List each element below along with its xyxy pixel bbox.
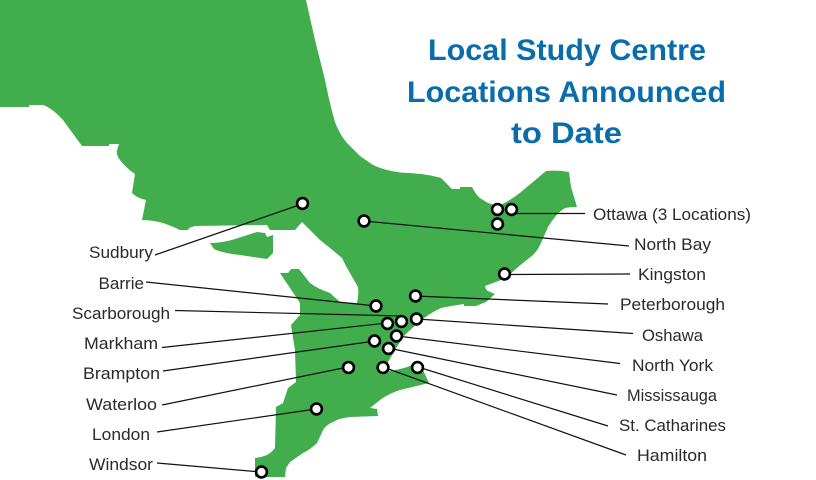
city labels: right: Kingston: [638, 265, 706, 284]
location markers: [256, 198, 517, 477]
map: Manitoulin Island: [210, 232, 273, 259]
city labels: right: St. Catharines: [619, 416, 726, 435]
city labels: right: [593, 205, 751, 465]
city labels: left: Waterloo: [86, 395, 157, 414]
city labels: right: Mississauga: [627, 386, 718, 405]
city labels: left: Scarborough: [72, 304, 170, 323]
city labels: right: Peterborough: [620, 295, 725, 314]
city labels: right: Ottawa (3 Locations): [593, 205, 751, 224]
title: Local Study Centre: [428, 34, 706, 67]
city labels: left: Windsor: [89, 455, 153, 474]
city labels: right: Oshawa: [642, 326, 704, 345]
city labels: left: London: [92, 425, 150, 444]
city labels: left: [72, 243, 170, 474]
leader lines: [146, 204, 633, 472]
title: to Date: [511, 117, 622, 150]
city labels: left: Markham: [84, 334, 158, 353]
city labels: right: Hamilton: [637, 446, 707, 465]
city labels: left: Sudbury: [89, 243, 153, 262]
title: [407, 34, 726, 150]
city labels: right: North Bay: [634, 235, 712, 254]
title: Locations Announced: [407, 76, 726, 109]
city labels: left: Brampton: [83, 364, 160, 383]
city labels: left: Barrie: [98, 274, 144, 293]
city labels: right: North York: [632, 356, 713, 375]
map: Ontario landmass: [0, 0, 577, 477]
